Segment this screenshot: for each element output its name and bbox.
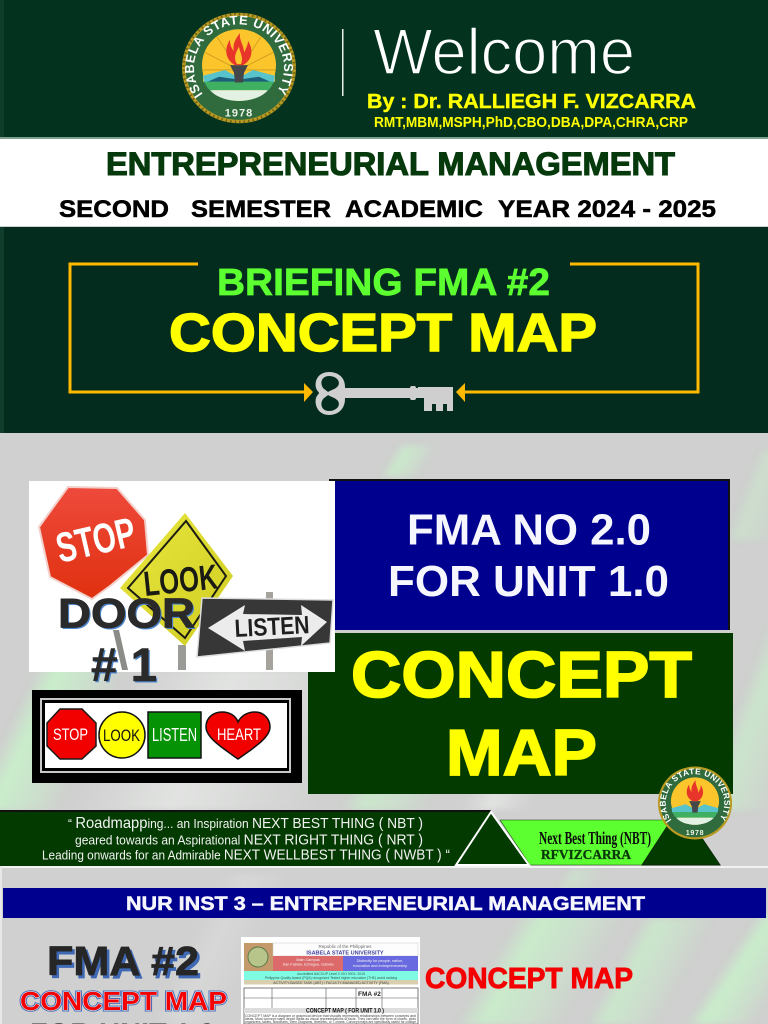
panel: FMA document thumbnail: Main Campus	[296, 958, 320, 962]
course band title: NUR INST 3 – ENTREPRENEURIAL MANAGEMENT	[126, 894, 645, 915]
document body: ideas. Most concept maps depict ideas as visual representations of facts. They can take the form of charts, plots	[245, 1017, 416, 1021]
panel: FMA number box	[329, 479, 730, 630]
divider line beside Welcome	[342, 29, 344, 96]
background: gray slide area with light streaks	[0, 433, 768, 1024]
author tag: RFVIZCARRA	[541, 848, 632, 863]
small triangle	[642, 822, 720, 865]
panel: signs image	[29, 481, 335, 692]
panel: FMA document thumbnail: Distinctly for people, nation,	[357, 959, 403, 963]
document republic line: Republic of the Philippines	[318, 944, 372, 949]
semester line: ACADEMIC	[345, 196, 483, 223]
document university heading: ISABELA STATE UNIVERSITY	[306, 950, 384, 956]
green tag	[500, 820, 720, 865]
door label: DOOR	[58, 590, 195, 636]
panel: course band	[3, 888, 766, 918]
icon: listen: LISTEN	[152, 725, 197, 745]
header band	[0, 0, 768, 139]
document body: CONCEPT MAP is a diagram or graphical device that visually represents relationships between concepts and	[245, 1014, 416, 1018]
icon: look	[99, 712, 145, 758]
course title: ENTREPRENEURIAL MANAGEMENT	[106, 146, 675, 182]
document body	[245, 1014, 416, 1024]
document title: CONCEPT MAP ( FOR UNIT 1.0 )	[306, 1008, 384, 1014]
banner title: CONCEPT MAP	[169, 303, 597, 363]
presenter credentials: RMT,MBM,MSPH,PhD,CBO,DBA,DPA,CHRA,CRP	[374, 114, 688, 131]
icon: look sign: LOOK	[142, 557, 219, 604]
door number: # 1	[92, 640, 158, 692]
icon: stop	[47, 709, 96, 759]
semester line	[59, 196, 716, 223]
FMA #2 heading: FMA #2	[50, 941, 202, 987]
panel: briefing banner	[0, 227, 768, 433]
panel: FMA document thumbnail: Accredited AACCUP Level V ISO 9001: 2015	[297, 972, 365, 976]
icon: stop sign: STOP	[51, 508, 140, 572]
icon: stop sign	[39, 487, 148, 599]
next best thing label: Next Best Thing (NBT)	[539, 828, 651, 849]
icon: small university seal: 1978	[686, 829, 704, 837]
briefing label: BRIEFING FMA #2	[217, 262, 550, 304]
panel: course title band	[0, 139, 768, 226]
icon: listen sign: LISTEN	[234, 611, 310, 643]
concept map subheading: CONCEPT MAP	[20, 986, 227, 1016]
panel: stop look listen heart strip	[32, 690, 302, 783]
panel: FMA document thumbnail: innovation and entrepreneurship	[353, 964, 407, 968]
triangle	[456, 812, 529, 865]
icon: listen sign	[197, 598, 333, 657]
icon: look: LOOK	[103, 726, 141, 745]
icon: heart: HEART	[217, 725, 261, 744]
icon: key	[316, 372, 453, 415]
icon: heart	[206, 712, 270, 759]
document body: organizers, tables, flowcharts, Venn Diagrams, timelines, or T-charts. Concept maps are specifically useful for college	[245, 1020, 416, 1024]
concept map subheading: CONCEPT MAP	[20, 986, 227, 1016]
quote line 1: “ Roadmapping... an Inspiration NEXT BEST THING ( NBT )	[68, 815, 423, 832]
map word: MAP	[446, 716, 597, 789]
panel: concept map box	[308, 633, 733, 794]
icon: Isabela State University seal: 1978	[225, 108, 253, 119]
panel: FMA document thumbnail: San Fabian, Echague, Isabela	[283, 962, 334, 966]
icon: stop: STOP	[53, 725, 88, 744]
semester line: SECOND	[59, 196, 169, 223]
panel: roadmap quote strip	[0, 810, 720, 866]
bracket frame with arrows	[70, 264, 698, 402]
semester line: SEMESTER	[191, 196, 331, 223]
icon: listen	[148, 712, 201, 758]
presenter name: By : Dr. RALLIEGH F. VIZCARRA	[367, 91, 696, 113]
quote line 2: geared towards an Aspirational NEXT RIGHT THING ( NRT )	[75, 832, 423, 848]
sign posts	[113, 592, 273, 670]
panel: FMA document thumbnail: Philippine Quality Award (PQA) recognized Tested higher education (THE) world ranking	[265, 976, 397, 980]
concept word: CONCEPT	[351, 638, 692, 711]
FMA #2 heading: FMA #2	[47, 938, 199, 984]
quote line 3: Leading onwards for an Admirable NEXT WELLBEST THING ( NWBT ) “	[42, 846, 450, 864]
document form label: FMA #2	[358, 991, 381, 998]
heading: Welcome: Welcome	[373, 15, 635, 88]
icon: look sign	[120, 513, 233, 646]
semester line: YEAR 2024 - 2025	[498, 196, 716, 223]
door label: DOOR	[60, 591, 196, 638]
FMA number line: FMA NO 2.0	[407, 506, 651, 554]
unit line: FOR UNIT 1.0	[388, 557, 669, 606]
panel: FMA document thumbnail: ACTIVITY-BASED TASK (ABT) / FACULTY-MANAGED ACTIVITY (FMA)	[273, 981, 389, 985]
concept map subheading: CONCEPT MAP	[20, 986, 227, 1016]
door number: # 1	[91, 638, 157, 691]
concept map label: CONCEPT MAP	[425, 963, 633, 995]
icon: Isabela State University seal: ISABELA STATE UNIVERSITY	[185, 16, 294, 98]
icon: small university seal: ISABELA STATE UNIVERSITY	[660, 768, 730, 823]
panel: FMA document thumbnail	[241, 937, 420, 1024]
